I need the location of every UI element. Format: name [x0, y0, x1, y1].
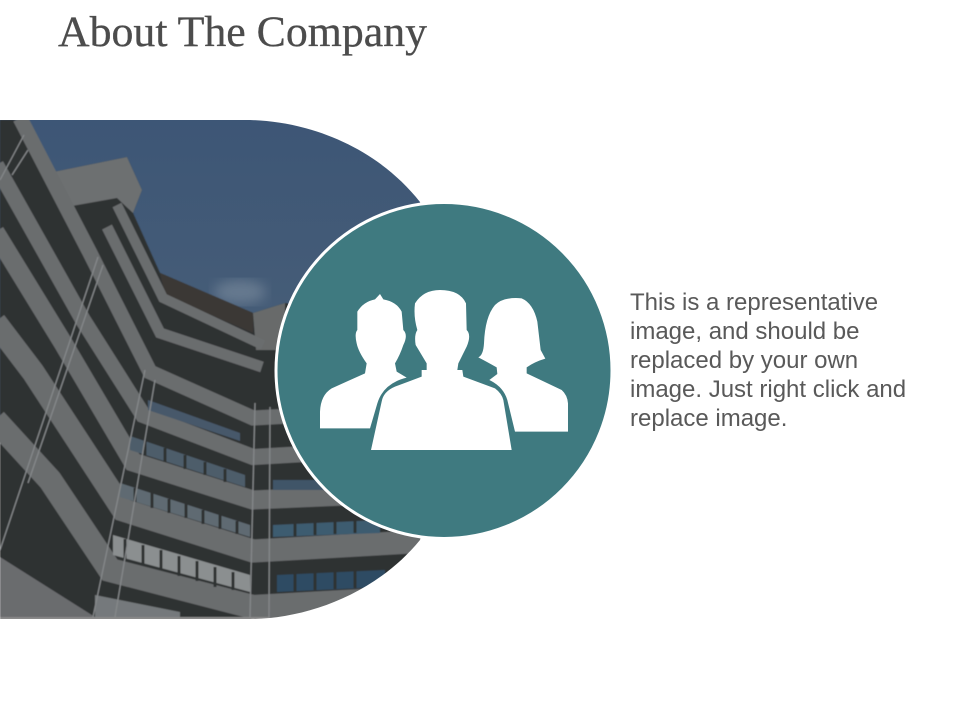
ground strip [0, 616, 270, 619]
body text: replace image. [630, 405, 787, 432]
body text [630, 289, 906, 432]
icon: right woman [478, 298, 568, 432]
windows [95, 400, 385, 620]
icon: left man [320, 294, 407, 428]
body text: image, and should be [630, 318, 860, 345]
building facade [0, 118, 430, 640]
body text: image. Just right click and [630, 376, 906, 403]
sky [0, 120, 420, 416]
icon: three people [320, 290, 568, 450]
teal circle [276, 202, 612, 538]
title: About The Company [58, 9, 427, 56]
cloud [214, 280, 266, 304]
body text: replaced by your own [630, 347, 858, 374]
window cables [0, 135, 270, 617]
body text: This is a representative [630, 289, 878, 316]
photo: office building in half-round frame [0, 120, 420, 619]
icon: centre man [371, 290, 512, 450]
